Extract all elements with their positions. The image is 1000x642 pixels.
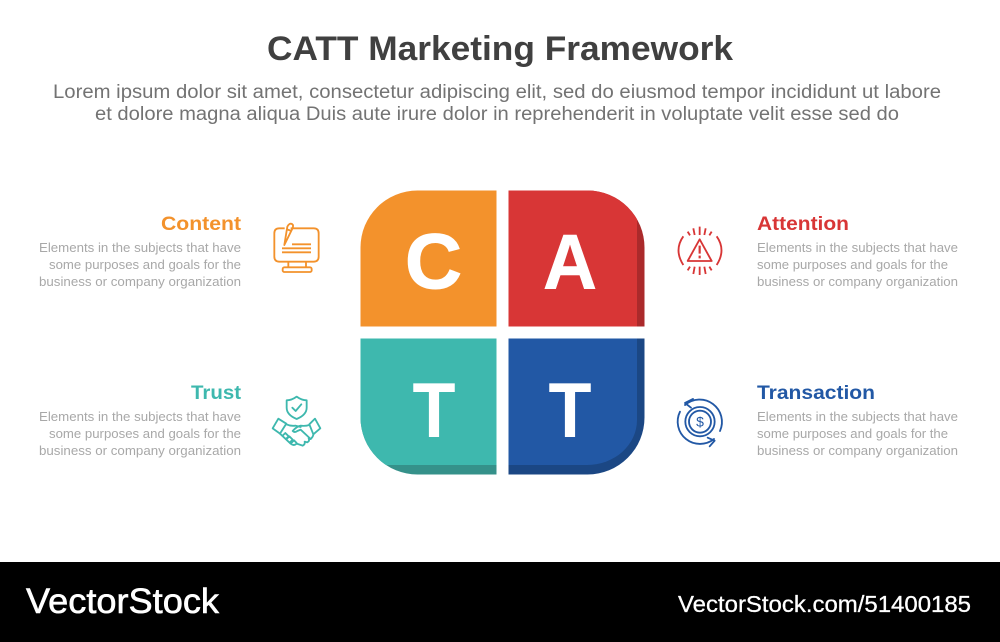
icon: monitor with pen xyxy=(274,224,319,272)
description: Attention: Elements in the subjects that have xyxy=(757,240,958,255)
quadrant: T blue: T xyxy=(548,366,592,454)
heading: Attention: Attention xyxy=(757,214,849,235)
quadrant: C orange: C xyxy=(405,217,462,305)
icon: coin with circular arrows xyxy=(678,399,722,446)
description: Trust: business or company organization xyxy=(39,443,241,458)
description: Content: business or company organization xyxy=(39,274,241,289)
heading: Transaction: Transaction xyxy=(757,383,875,404)
description: Transaction: business or company organization xyxy=(757,443,958,458)
description: Transaction: some purposes and goals for the xyxy=(757,426,948,441)
quadrant: A red: A xyxy=(543,218,597,306)
CATT quadrant matrix xyxy=(360,190,644,474)
description: Transaction xyxy=(757,409,958,458)
description: Trust xyxy=(39,409,241,458)
description: Transaction: Elements in the subjects that have xyxy=(757,409,958,424)
description: Attention: business or company organization xyxy=(757,274,958,289)
footer bar xyxy=(0,562,1000,642)
quadrant: A red xyxy=(508,190,644,326)
quadrant: C orange xyxy=(360,190,496,326)
description: Content: Elements in the subjects that have xyxy=(39,240,241,255)
description: Attention xyxy=(757,240,958,289)
subtitle text block: Lorem ipsum dolor sit amet, consectetur adipiscing elit, sed do eiusmod tempor incididunt ut labore xyxy=(53,82,941,103)
panel: Attention xyxy=(678,214,958,289)
panel: Transaction xyxy=(678,383,958,458)
subtitle text block xyxy=(53,82,941,125)
icon: shield and handshake xyxy=(273,397,320,446)
panel: Trust xyxy=(39,383,320,458)
heading: Trust: Trust xyxy=(191,383,242,404)
heading: Content: Content xyxy=(161,214,242,235)
description: Trust: Elements in the subjects that have xyxy=(39,409,241,424)
icon: coin with circular arrows: $ xyxy=(696,413,704,429)
description: Content: some purposes and goals for the xyxy=(49,257,241,272)
icon: warning triangle xyxy=(678,227,721,275)
description: Attention: some purposes and goals for the xyxy=(757,257,948,272)
description: Content xyxy=(39,240,241,289)
title: CATT Marketing Framework xyxy=(267,30,733,68)
image reference: VectorStock.com/51400185 xyxy=(678,591,971,617)
brand wordmark: VectorStock xyxy=(26,582,220,621)
quadrant: T teal: T xyxy=(412,366,456,454)
panel: Content xyxy=(39,214,319,289)
description: Trust: some purposes and goals for the xyxy=(49,426,241,441)
subtitle text block: et dolore magna aliqua Duis aute irure dolor in reprehenderit in voluptate velit esse sed do xyxy=(95,104,899,125)
quadrant: T blue xyxy=(508,338,644,474)
quadrant: T teal xyxy=(360,338,496,474)
